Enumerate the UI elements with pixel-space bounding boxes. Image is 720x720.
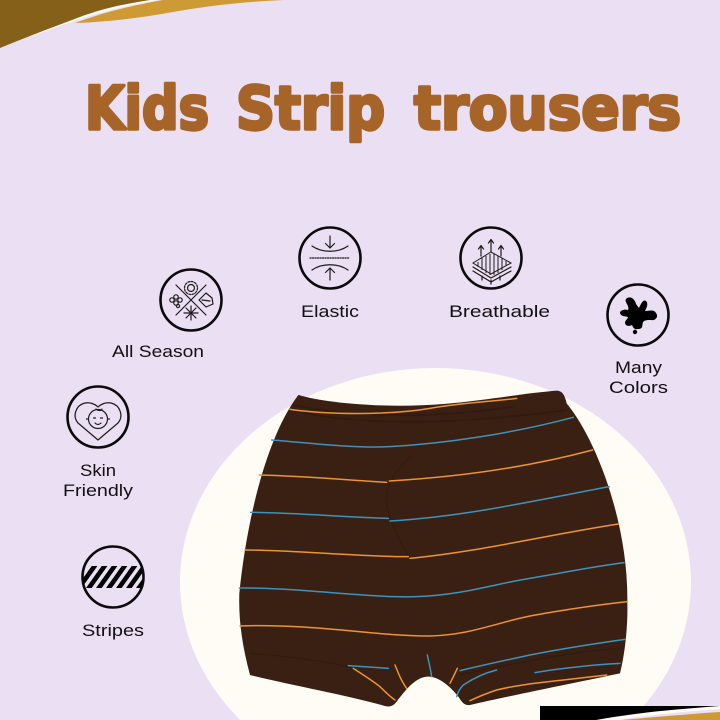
feature: Skin Friendly [63, 386, 134, 500]
bottom right corner wave [540, 706, 720, 720]
label: Skin Friendly: Skin [80, 462, 116, 480]
feature: Many Colors [608, 284, 668, 397]
stripes [239, 398, 627, 701]
label: Breathable: Breathable [449, 303, 550, 321]
icon: breathable fabric layers [460, 228, 522, 288]
label: Many Colors: Colors [609, 379, 668, 397]
icon: elastic compression [300, 228, 360, 288]
label: Elastic: Elastic [301, 303, 359, 321]
cream backdrop ellipse [180, 368, 691, 720]
product photo: striped brown shorts [239, 391, 627, 706]
icon: paint splat [608, 284, 668, 346]
feature: Elastic [300, 228, 360, 321]
icon: baby face in heart [68, 386, 128, 448]
waistband shading [292, 405, 567, 422]
top corner wave [0, 0, 284, 48]
label: Skin Friendly: Friendly [63, 482, 134, 500]
title: Strip [236, 74, 385, 144]
icon: four seasons [160, 270, 222, 330]
gusset fold [387, 455, 412, 558]
label: Stripes: Stripes [82, 622, 144, 640]
feature: Breathable [449, 228, 550, 321]
title [85, 74, 681, 144]
label: Many Colors: Many [615, 359, 663, 377]
feature: Stripes [81, 545, 145, 640]
label: All Season: All Season [112, 343, 204, 361]
title: Kids [85, 74, 209, 144]
title: trousers [414, 74, 681, 144]
icon: stripes [81, 545, 145, 609]
feature: All Season [112, 270, 222, 361]
